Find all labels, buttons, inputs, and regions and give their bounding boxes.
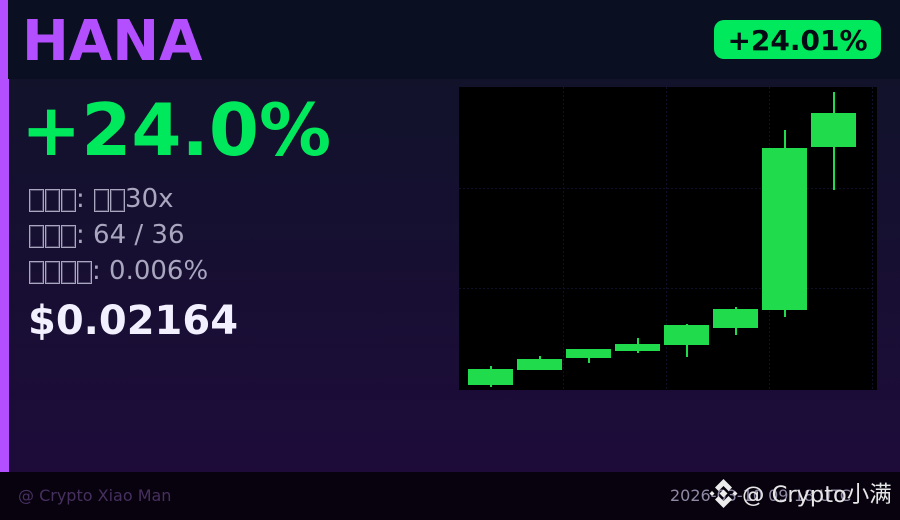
info: leverage <box>29 184 174 214</box>
badge: percent change: +24.01% <box>727 24 868 57</box>
left accent bar <box>0 79 9 472</box>
icon: binance diamond <box>710 479 738 508</box>
header band <box>0 0 900 79</box>
info: funding rate: : 0.006% <box>92 256 208 286</box>
info: long short ratio: : 64 / 36 <box>76 220 184 250</box>
watermark text: @ Crypto小满 <box>742 482 892 508</box>
headline percent change: +24.0% <box>21 88 331 172</box>
info: funding rate <box>29 256 208 286</box>
footer credit: @ Crypto Xiao Man <box>18 486 171 505</box>
price: $0.02164 <box>28 298 238 344</box>
info: leverage: : 30x <box>76 184 174 214</box>
footer band <box>0 472 900 520</box>
candlestick chart <box>459 87 877 390</box>
info: long short ratio <box>29 220 184 250</box>
header accent bar <box>0 0 8 79</box>
title: token symbol: HANA <box>22 9 202 74</box>
candles <box>468 92 856 387</box>
footer timestamp: 2026-03-10 09:18 UTC <box>670 486 851 505</box>
watermark <box>710 479 892 508</box>
